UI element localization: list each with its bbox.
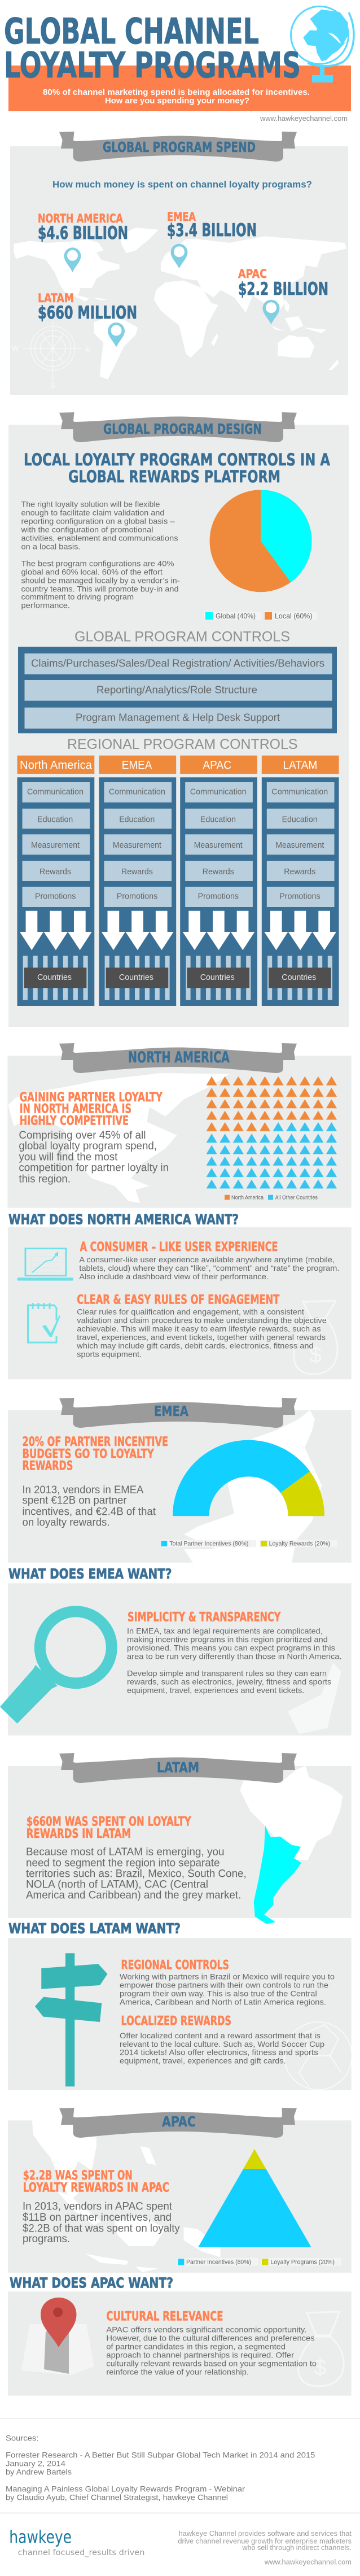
- panel: latam: [8, 1766, 352, 1924]
- regional column: latam: [262, 777, 339, 1006]
- design body text: global and 60% local. 60% of the effort: [21, 567, 163, 576]
- regional column: latam: Promotions: [279, 892, 321, 901]
- want: localized rewards: equipment, travel, experiences and gift cards.: [120, 2056, 286, 2065]
- want: localized rewards: relevant to the local culture. Such as, World Soccer Cup: [120, 2039, 324, 2048]
- latam body text: territories such as: Brazil, Mexico, South Cone,: [26, 1868, 247, 1880]
- regional column: apac: Promotions: [198, 892, 239, 901]
- heading: regional program controls: REGIONAL PROGRAM CONTROLS: [67, 736, 298, 752]
- latam body text: America and Caribbean) and the grey market.: [26, 1890, 241, 1902]
- regional column: emea: Communication: [109, 788, 165, 797]
- background money bag: [294, 1301, 337, 1374]
- ribbon: emea: EMEA: [154, 1403, 189, 1419]
- want: simplicity and transparency: making incentive programs in this region prioritized and: [127, 1635, 328, 1644]
- stat: north america: $4.6 BILLION: [38, 223, 128, 243]
- pyramid legend: [177, 2258, 341, 2266]
- apac body text: programs.: [23, 2233, 70, 2245]
- regional headers: APAC: [203, 759, 231, 772]
- north america body text: this region.: [19, 1173, 71, 1185]
- global controls box: Claims/Purchases/Sales/Deal Registration/ Activities/Behaviors: [31, 658, 324, 669]
- want: localized rewards: Offer localized content and a reward assortment that is: [120, 2031, 321, 2040]
- compass: E: [86, 344, 91, 352]
- apac body text: $11B on partner incentives, and: [23, 2212, 172, 2224]
- sources: Forrester Research - A Better But Still Subpar Global Tech Market in 2014 and 2015: [6, 2451, 315, 2460]
- apac heading: LOYALTY REWARDS IN APAC: [23, 2181, 169, 2195]
- want: cultural relevance: However, due to the cultural differences and preferences: [106, 2333, 315, 2342]
- ribbon: north america: [59, 1043, 297, 1073]
- want: simplicity and transparency: Develop simple and transparent rules so they can earn: [127, 1668, 327, 1677]
- regional column: latam: Countries: [282, 973, 316, 982]
- stat: emea: EMEA: [167, 210, 196, 224]
- regional headers: North America: [20, 759, 92, 772]
- north america heading: GAINING PARTNER LOYALTY: [20, 1091, 163, 1105]
- north america heading: IN NORTH AMERICA IS: [20, 1102, 131, 1117]
- regional column: latam: Measurement: [275, 841, 324, 850]
- company description: drive channel revenue growth for enterprise marketers: [178, 2537, 352, 2545]
- emea body text: incentives, and €2.4B of that: [23, 1506, 156, 1518]
- regional column: apac: Education: [200, 816, 236, 825]
- north america body text: global loyalty program spend,: [19, 1140, 157, 1152]
- donut legend: Loyalty Rewards (20%): [269, 1541, 330, 1548]
- sources: by Claudio Ayub, Chief Channel Strategist, hawkeye Channel: [6, 2493, 228, 2502]
- want: simplicity and transparency: SIMPLICITY & TRANSPARENCY: [128, 1611, 281, 1625]
- ribbon: global program spend: [59, 132, 297, 162]
- want: cultural relevance: reinforce the value of your relationship.: [106, 2367, 249, 2376]
- emea heading: [23, 1435, 168, 1473]
- ribbon: north america: NORTH AMERICA: [128, 1049, 230, 1066]
- want: clear rules: sports equipment.: [77, 1349, 142, 1358]
- ribbon: global program design: [59, 412, 297, 442]
- website url: www.hawkeyechannel.com: [260, 114, 348, 123]
- panel: global program design: [8, 425, 349, 1027]
- want: regional controls: [120, 1959, 335, 2006]
- want: simplicity and transparency: equipment, travel, experiences and event tickets.: [127, 1685, 304, 1694]
- ribbon: global program design: GLOBAL PROGRAM DESIGN: [103, 421, 262, 437]
- company description: www.hawkeyechannel.com: [264, 2558, 352, 2566]
- emea body text: on loyalty rewards.: [23, 1516, 109, 1528]
- regional column: north america: Promotions: [35, 892, 76, 901]
- pictogram legend: North America: [231, 1195, 264, 1201]
- compass: W: [12, 344, 19, 352]
- want: clear rules: CLEAR & EASY RULES OF ENGAGEMENT: [77, 1293, 279, 1307]
- regional headers: LATAM: [283, 759, 317, 772]
- stat: latam: [38, 291, 137, 323]
- design body text: The best program configurations are 40%: [21, 559, 174, 568]
- apac heading: [23, 2169, 169, 2195]
- subtitle: How are you spending your money?: [105, 96, 249, 106]
- donut legend: Total Partner Incentives (80%): [169, 1541, 248, 1548]
- want: cultural relevance: of partner candidates in this region, a segmented: [106, 2342, 286, 2351]
- logo: hawkeye: channel focused_results driven: [18, 2548, 144, 2557]
- stat: latam: LATAM: [38, 291, 74, 305]
- want: simplicity and transparency: [127, 1611, 342, 1694]
- apac body text: $2.2B of that was spent on loyalty: [23, 2223, 180, 2235]
- want: consumer-like experience: Also include a dashboard view of their performance.: [79, 1272, 269, 1281]
- latam body text: [26, 1846, 247, 1902]
- heading: what does north america want: WHAT DOES NORTH AMERICA WANT?: [8, 1211, 239, 1228]
- pyramid legend: Partner Incentives (80%): [186, 2259, 251, 2266]
- design heading: [24, 450, 330, 486]
- want: clear rules: which may include gift cards, debit cards, electronics, fitness and: [76, 1341, 314, 1350]
- north america heading: [20, 1091, 163, 1128]
- icon: globe: [291, 6, 354, 82]
- regional column: latam: Rewards: [284, 868, 315, 877]
- regional column: emea: Countries: [119, 973, 153, 982]
- design heading: GLOBAL REWARDS PLATFORM: [68, 467, 280, 486]
- background money bag: $: [309, 1343, 322, 1367]
- regional headers: [17, 756, 339, 774]
- panel: latam wants: [8, 1938, 352, 2090]
- apac heading: $2.2B WAS SPENT ON: [23, 2169, 133, 2183]
- regional column: latam: Education: [282, 816, 318, 825]
- world map: [14, 228, 347, 380]
- regional column: emea: Rewards: [121, 868, 153, 877]
- latam heading: $660M WAS SPENT ON LOYALTY: [27, 1815, 191, 1829]
- global controls box: [18, 647, 337, 733]
- icon: map pin latam: [108, 322, 125, 347]
- regional column: apac: Measurement: [194, 841, 243, 850]
- icon: laptop chart: [17, 1248, 73, 1281]
- want: cultural relevance: [106, 2309, 317, 2376]
- regional column: apac: [180, 777, 257, 1006]
- company description: who sell through indirect channels.: [242, 2544, 352, 2552]
- subtitle: [43, 88, 310, 106]
- emea body text: In 2013, vendors in EMEA: [23, 1484, 144, 1496]
- want: localized rewards: 2014 tickets! Also offer electronics, fitness and sports: [120, 2048, 318, 2057]
- regional column: north america: [17, 777, 94, 1006]
- north america body text: [19, 1130, 169, 1185]
- regional column: emea: Measurement: [113, 841, 161, 850]
- pyramid legend: Loyalty Programs (20%): [270, 2259, 335, 2266]
- want: regional controls: America, Caribbean and North of Latin America regions.: [120, 1997, 326, 2006]
- emea body text: spent €12B on partner: [23, 1495, 127, 1507]
- regional headers: EMEA: [122, 759, 152, 772]
- design body text: on a local basis.: [21, 542, 80, 551]
- sources: [6, 2434, 315, 2502]
- pyramid chart: [198, 2149, 311, 2247]
- apac body text: In 2013, vendors in APAC spent: [23, 2201, 173, 2213]
- company description: [178, 2530, 352, 2566]
- icon: location pin on road: [21, 2298, 94, 2375]
- latam heading: REWARDS IN LATAM: [27, 1827, 131, 1841]
- want: consumer-like experience: A CONSUMER – LIKE USER EXPERIENCE: [80, 1240, 278, 1254]
- ribbon: latam: [59, 1753, 297, 1783]
- want: clear rules: achievable. This will make it easy to earn lifestyle rewards, such as: [77, 1324, 321, 1333]
- pie legend: Global (40%): [216, 612, 256, 620]
- sources: Sources:: [6, 2434, 38, 2443]
- panel: emea wants: [0, 1583, 352, 1736]
- north america heading: HIGHLY COMPETITIVE: [20, 1114, 129, 1128]
- want: clear rules: Clear rules for qualification and engagement, with a consistent: [77, 1307, 304, 1317]
- want: cultural relevance: culturally relevant rewards based on your segmentation to: [106, 2359, 317, 2368]
- icon: map pin north america: [64, 247, 81, 272]
- emea heading: REWARDS: [23, 1459, 73, 1473]
- header banner: [4, 6, 354, 123]
- map: southeast asia: [32, 2101, 221, 2272]
- emea body text: [23, 1484, 156, 1528]
- regional column: latam: Communication: [271, 788, 328, 797]
- regional column: north america: Countries: [37, 973, 72, 982]
- pie chart: [210, 490, 311, 592]
- north america body text: Comprising over 45% of all: [19, 1130, 146, 1141]
- icon: signpost: [35, 1953, 107, 2086]
- want: clear rules: [76, 1293, 327, 1358]
- heading: what does latam want: WHAT DOES LATAM WANT?: [8, 1920, 181, 1937]
- panel: emea: [8, 1410, 352, 1563]
- design body text: with the configuration of promotional: [20, 525, 153, 534]
- stat: emea: $3.4 BILLION: [167, 220, 257, 241]
- design body text: [20, 500, 180, 610]
- sources: Managing A Painless Global Loyalty Rewards Program - Webinar: [6, 2485, 245, 2494]
- panel: apac wants: [8, 2291, 352, 2396]
- design body text: enough to facilitate claim validation and: [21, 508, 165, 517]
- pie legend: Local (60%): [275, 612, 313, 620]
- stat: north america: [38, 212, 128, 243]
- design body text: reporting configuration on a global basis –: [21, 517, 175, 526]
- emea heading: 20% OF PARTNER INCENTIVE: [23, 1435, 168, 1449]
- ribbon: apac: [59, 2108, 297, 2138]
- design body text: should be managed locally by a vendor’s in-: [21, 576, 180, 585]
- want: simplicity and transparency: provisioned. This means you can expect programs in this: [127, 1643, 335, 1652]
- icon: map pin emea: [170, 244, 187, 269]
- icon: map pin apac: [263, 300, 280, 325]
- panel: apac: [8, 2101, 352, 2273]
- ribbon: emea: [59, 1398, 297, 1428]
- latam heading: [27, 1815, 191, 1841]
- apac body text: [23, 2201, 180, 2245]
- want: clear rules: travel, experiences, and event tickets, together with general rewards: [77, 1333, 326, 1342]
- latam body text: NOLA (north of LATAM), CAC (Central: [26, 1878, 208, 1890]
- map: europe: [184, 1410, 322, 1563]
- want: cultural relevance: CULTURAL RELEVANCE: [106, 2309, 223, 2324]
- pictogram legend: [225, 1195, 318, 1201]
- latam body text: Because most of LATAM is emerging, you: [26, 1846, 225, 1858]
- regional column: emea: [99, 777, 176, 1006]
- stat: north america: NORTH AMERICA: [38, 212, 124, 225]
- title: [4, 11, 301, 86]
- ribbon: latam: LATAM: [157, 1759, 199, 1776]
- half donut chart: [173, 1440, 324, 1516]
- question: How much money is spent on channel loyalty programs?: [52, 179, 312, 190]
- regional column: emea: Education: [119, 816, 155, 825]
- logo: hawkeye: [9, 2527, 144, 2557]
- north america body text: you will find the most: [19, 1151, 118, 1163]
- company description: hawkeye Channel provides software and services that: [179, 2530, 352, 2538]
- regional column: north america: Education: [37, 816, 73, 825]
- design body text: commitment to driving program: [21, 592, 134, 601]
- panel: north america wants: [8, 1227, 352, 1379]
- background money bag: $: [314, 2355, 326, 2380]
- want: cultural relevance: APAC offers vendors significant economic opportunity.: [106, 2325, 306, 2334]
- regional column: apac: Countries: [200, 973, 235, 982]
- design body text: activities, enablement and communications: [21, 534, 178, 543]
- ribbon: apac: APAC: [162, 2113, 196, 2130]
- map: north america: [8, 1073, 230, 1203]
- want: localized rewards: [120, 2015, 324, 2065]
- icon: magnifying glass: [0, 1611, 112, 1724]
- regional column: north america: Communication: [27, 788, 84, 797]
- stat: latam: $660 MILLION: [38, 303, 137, 323]
- want: regional controls: empower those partners with their own controls to run the: [120, 1980, 328, 1989]
- compass: S: [50, 381, 55, 390]
- design body text: performance.: [21, 601, 70, 610]
- stat: apac: [238, 267, 328, 299]
- latam body text: need to segment the region into separate: [26, 1857, 220, 1869]
- global controls box: Reporting/Analytics/Role Structure: [96, 684, 257, 695]
- background soccer ball: [284, 2022, 352, 2090]
- donut legend: [161, 1540, 337, 1548]
- ribbon: global program spend: GLOBAL PROGRAM SPEND: [103, 139, 256, 155]
- want: regional controls: REGIONAL CONTROLS: [121, 1959, 229, 1973]
- background airplane shape: [288, 1663, 341, 1734]
- title: GLOBAL CHANNEL: [4, 11, 259, 52]
- heading: what does apac want: WHAT DOES APAC WANT?: [10, 2275, 173, 2291]
- want: simplicity and transparency: In EMEA, tax and legal requirements are complicated,: [127, 1627, 323, 1636]
- want: consumer-like experience: tablets, cloud) where they can “like”, “comment” and “rate” the program.: [79, 1263, 340, 1272]
- regional column: north america: Rewards: [39, 868, 71, 877]
- icon: notepad with check: [28, 1303, 60, 1343]
- heading: what does emea want: WHAT DOES EMEA WANT?: [8, 1566, 172, 1582]
- triangle pictogram chart: [207, 1076, 340, 1191]
- want: consumer-like experience: [79, 1240, 340, 1281]
- pictogram legend: All Other Countries: [275, 1195, 318, 1201]
- sources: January 2, 2014: [6, 2459, 65, 2468]
- design body text: country teams. This will promote buy-in and: [21, 584, 178, 593]
- panel: north america: [7, 1056, 352, 1208]
- regional column: north america: Measurement: [31, 841, 80, 850]
- want: simplicity and transparency: area to be run very differently than those in North America.: [127, 1651, 342, 1660]
- regional column: apac: Rewards: [203, 868, 234, 877]
- regional column: apac: Communication: [190, 788, 247, 797]
- map: south america: [240, 1766, 343, 1924]
- heading: global program controls: GLOBAL PROGRAM CONTROLS: [74, 629, 290, 645]
- orange band: [8, 66, 351, 111]
- logo: hawkeye: hawkeye: [9, 2527, 72, 2548]
- want: regional controls: Working with partners in Brazil or Mexico will require you to: [120, 1972, 335, 1981]
- north america body text: competition for partner loyalty in: [19, 1162, 169, 1174]
- subtitle: 80% of channel marketing spend is being allocated for incentives.: [43, 88, 310, 97]
- want: localized rewards: LOCALIZED REWARDS: [121, 2015, 231, 2029]
- want: consumer-like experience: A consumer-like user experience available anywhere anytime (mobile,: [79, 1255, 335, 1264]
- want: simplicity and transparency: rewards, such as electronics, jewelry, fitness and sports: [127, 1677, 331, 1686]
- stat: apac: APAC: [238, 267, 267, 281]
- pie legend: [204, 612, 317, 620]
- compass: [12, 322, 91, 390]
- want: regional controls: program their own way. This is also true of the Central: [120, 1989, 317, 1998]
- want: clear rules: validation and claim procedures to make understanding the objective: [77, 1316, 327, 1325]
- sources: by Andrew Bartels: [6, 2468, 72, 2477]
- stat: emea: [167, 210, 257, 241]
- panel: global program spend: [10, 146, 348, 395]
- design body text: The right loyalty solution will be flexible: [21, 500, 160, 509]
- regional column: emea: Promotions: [117, 892, 157, 901]
- global controls box: Program Management & Help Desk Support: [76, 712, 280, 723]
- want: cultural relevance: approach to channel partnerships is required. Offer: [106, 2350, 294, 2359]
- emea heading: BUDGETS GO TO LOYALTY: [23, 1448, 154, 1462]
- background money bag: [298, 2312, 344, 2386]
